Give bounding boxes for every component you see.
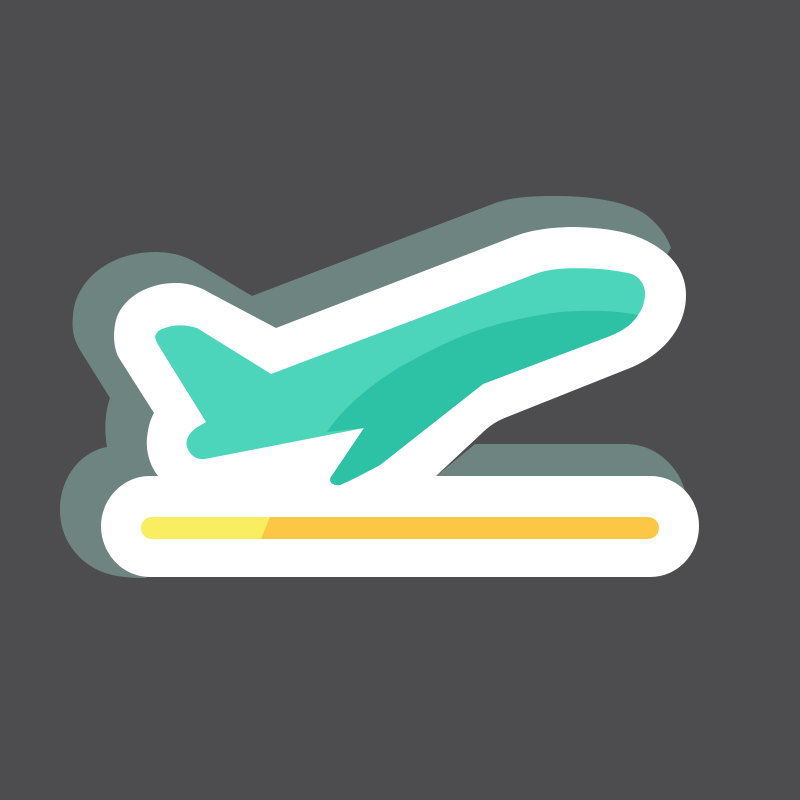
airplane shaded belly and wing [327,311,638,485]
sticker white outline [101,227,699,577]
shadow of airplane [60,196,671,578]
airplane body [155,268,645,485]
sticker shadow [60,196,687,578]
shadow of runway [435,444,687,530]
runway orange section [141,517,659,539]
runway bar [141,517,659,539]
runway yellow section [141,517,270,539]
